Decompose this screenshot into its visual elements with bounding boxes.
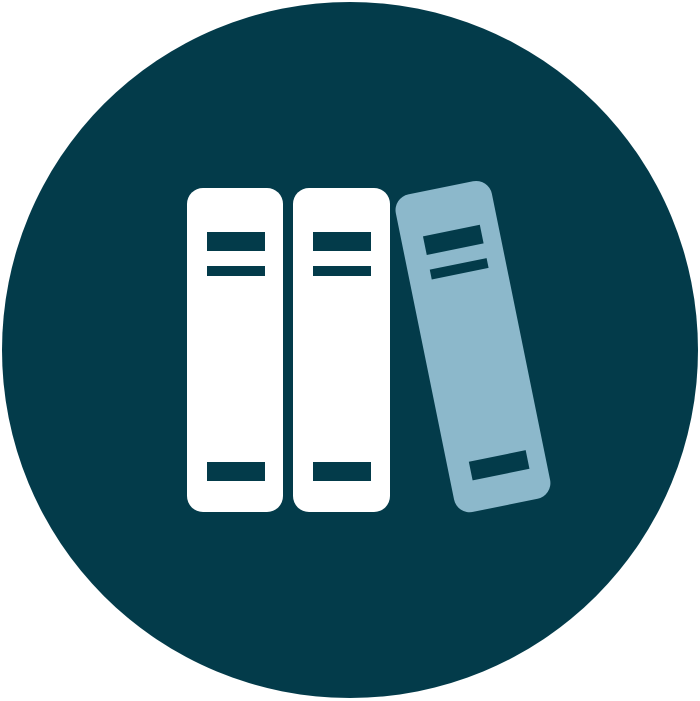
- book 2: [293, 188, 390, 512]
- book 1: [187, 188, 283, 512]
- book 3 tilted: [393, 178, 553, 515]
